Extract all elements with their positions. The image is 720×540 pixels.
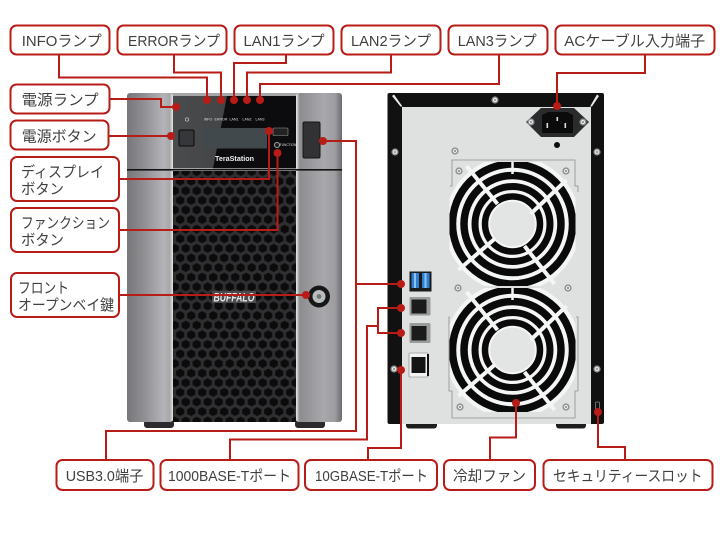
label: power lamp [10,84,110,114]
label: USB 3.0 port [56,460,154,490]
front view of TeraStation NAS [127,93,342,428]
leader: LAN1 lamp [230,55,286,104]
leader: function button [119,149,282,230]
drive bay latch [303,122,320,158]
label: function button: ボタン [21,232,64,249]
label: security slot [544,460,712,490]
leader: AC inlet [553,55,645,110]
rear view of TeraStation NAS [388,93,604,428]
rear feet [406,421,586,428]
BUFFALO logo: BUFFALO [214,292,255,304]
label: INFO lamp: INFOランプ [22,33,102,50]
control panel [173,96,297,168]
leader: LAN3 lamp [256,55,499,104]
LCD display [202,128,267,148]
frame mitred corner highlights [392,94,599,106]
1000BASE-T LAN port 1 [410,297,430,316]
label: display button: ディスプレイ [21,163,104,181]
TeraStation logo: TeraStation [215,156,254,163]
LED labels: LAN1 [230,118,238,122]
label: ERROR lamp [118,26,226,54]
lower cooling fan [444,282,580,418]
LED labels: ERROR [215,118,228,122]
LED labels: LAN3 [256,118,264,122]
BUFFALO logo [212,291,256,304]
LED labels: LAN2 [242,118,252,122]
label: front open bay key: フロント [18,280,69,297]
10GBASE-T LAN port [409,353,429,377]
label: power lamp: 電源ランプ [22,92,99,109]
leader: 1000BASE-T ports [230,304,405,460]
leader: 10GBASE-T port [368,366,405,460]
silver back plate [402,107,591,424]
front feet [144,420,325,428]
fan mounting plate outline [449,160,578,418]
label: AC cable input: ACケーブル入力端子 [564,32,705,50]
power icon [185,118,189,121]
label: 1000BASE-T port: 1000BASE-Tポート [168,468,291,485]
LED labels [204,118,264,122]
label: LAN3 lamp [448,26,548,54]
label: AC cable input [556,26,714,54]
right metal column [296,93,342,422]
power button [179,130,194,146]
label: display button [11,157,119,201]
label: power button [10,120,108,150]
label: ERROR lamp: ERRORランプ [128,33,220,50]
security slot [596,402,600,410]
label: power button: 電源ボタン [22,128,97,146]
label: LAN2 lamp [342,26,440,54]
label: 10GBASE-T port [305,460,437,490]
function button [274,142,280,148]
label: LAN2 lamp: LAN2ランプ [351,33,431,50]
label: LAN1 lamp [234,26,334,54]
top edge strip [160,93,310,97]
leader: cooling fan [490,399,520,460]
label: front open bay key [11,273,119,317]
label: display button: ボタン [21,181,64,198]
leader: LAN2 lamp [243,55,391,104]
leader: front bay key [119,291,310,299]
label: function button: ファンクション [21,215,110,232]
label: 1000BASE-T port [160,460,298,490]
chassis screws [390,96,601,373]
label: LAN3 lamp: LAN3ランプ [458,33,537,50]
USB 3.0 ports [410,272,432,292]
leader: display button [119,127,273,179]
leader: security slot [594,408,625,460]
AC inlet [526,108,589,148]
label: LAN1 lamp: LAN1ランプ [244,33,324,50]
fan screws [454,167,572,411]
label: INFO lamp [10,26,110,54]
1000BASE-T LAN port 2 [410,323,430,343]
front bay key lock [308,286,330,308]
left metal column [127,93,173,422]
top section divider [127,169,342,171]
label: front open bay key: オープンベイ鍵 [18,297,114,314]
leader: USB 3.0 front and rear [106,137,405,460]
leader: power button [109,132,175,140]
label: security slot: セキュリティースロット [553,468,702,485]
upper cooling fan [444,156,580,292]
label: cooling fan [444,460,535,490]
black chassis frame [388,93,604,424]
label: function button [11,208,119,252]
display button [273,128,288,136]
label: cooling fan: 冷却ファン [453,468,526,485]
leader: INFO lamp [59,55,211,104]
leader: power lamp [110,99,180,111]
function label: FUNCTION [280,143,297,147]
label: 10GBASE-T port: 10GBASE-Tポート [315,468,428,485]
leader: ERROR lamp [174,55,225,104]
hexagon mesh front grille [173,171,296,422]
LED labels: INFO [204,118,212,122]
label: USB 3.0 port: USB3.0端子 [66,468,143,485]
